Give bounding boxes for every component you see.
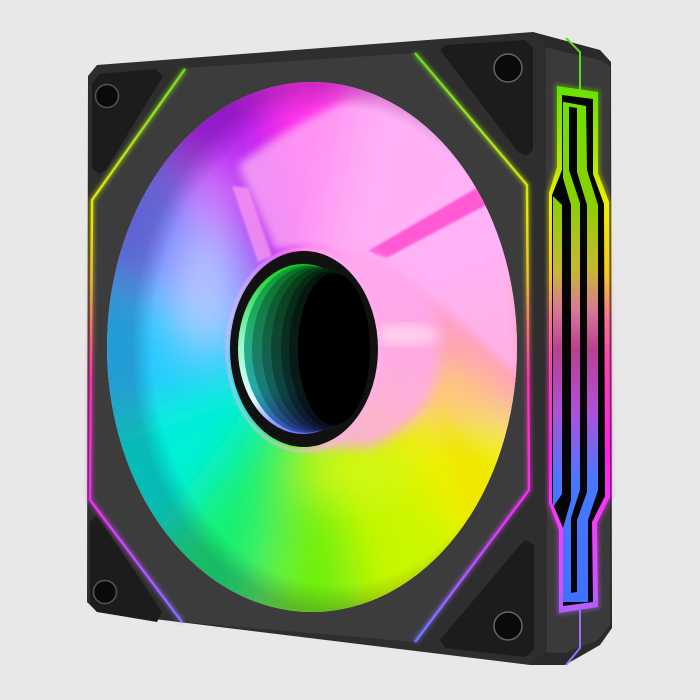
side bar: lower light trace <box>566 610 580 665</box>
fan front frame <box>87 32 547 665</box>
side bar: glow <box>549 86 610 613</box>
side bar: stripe one <box>553 196 562 507</box>
fan side face <box>530 32 612 665</box>
side RGB light bar <box>549 38 610 665</box>
side bar: black recess <box>552 95 605 606</box>
blade highlights <box>238 100 517 375</box>
infographic: RGB fan product image <box>84 32 615 666</box>
hub: infinity mirror <box>230 251 378 447</box>
side bar: stripe two <box>563 102 580 594</box>
soft interior tints <box>167 155 500 498</box>
front LED strip: left <box>90 69 185 622</box>
hub: cylinder <box>227 249 440 451</box>
corner pad: bottom right <box>440 540 534 657</box>
bezel around the impeller <box>90 53 529 642</box>
corner pad: bottom left <box>90 515 162 622</box>
corner pad: top right <box>440 40 533 156</box>
front LED strip: right <box>415 53 529 642</box>
side bar: upper light trace <box>566 38 580 90</box>
impeller: RGB colour wash <box>107 82 517 612</box>
side bar: stripe three <box>563 102 598 602</box>
corner pad: top left <box>92 69 163 174</box>
side bar: outer LED <box>549 86 610 613</box>
